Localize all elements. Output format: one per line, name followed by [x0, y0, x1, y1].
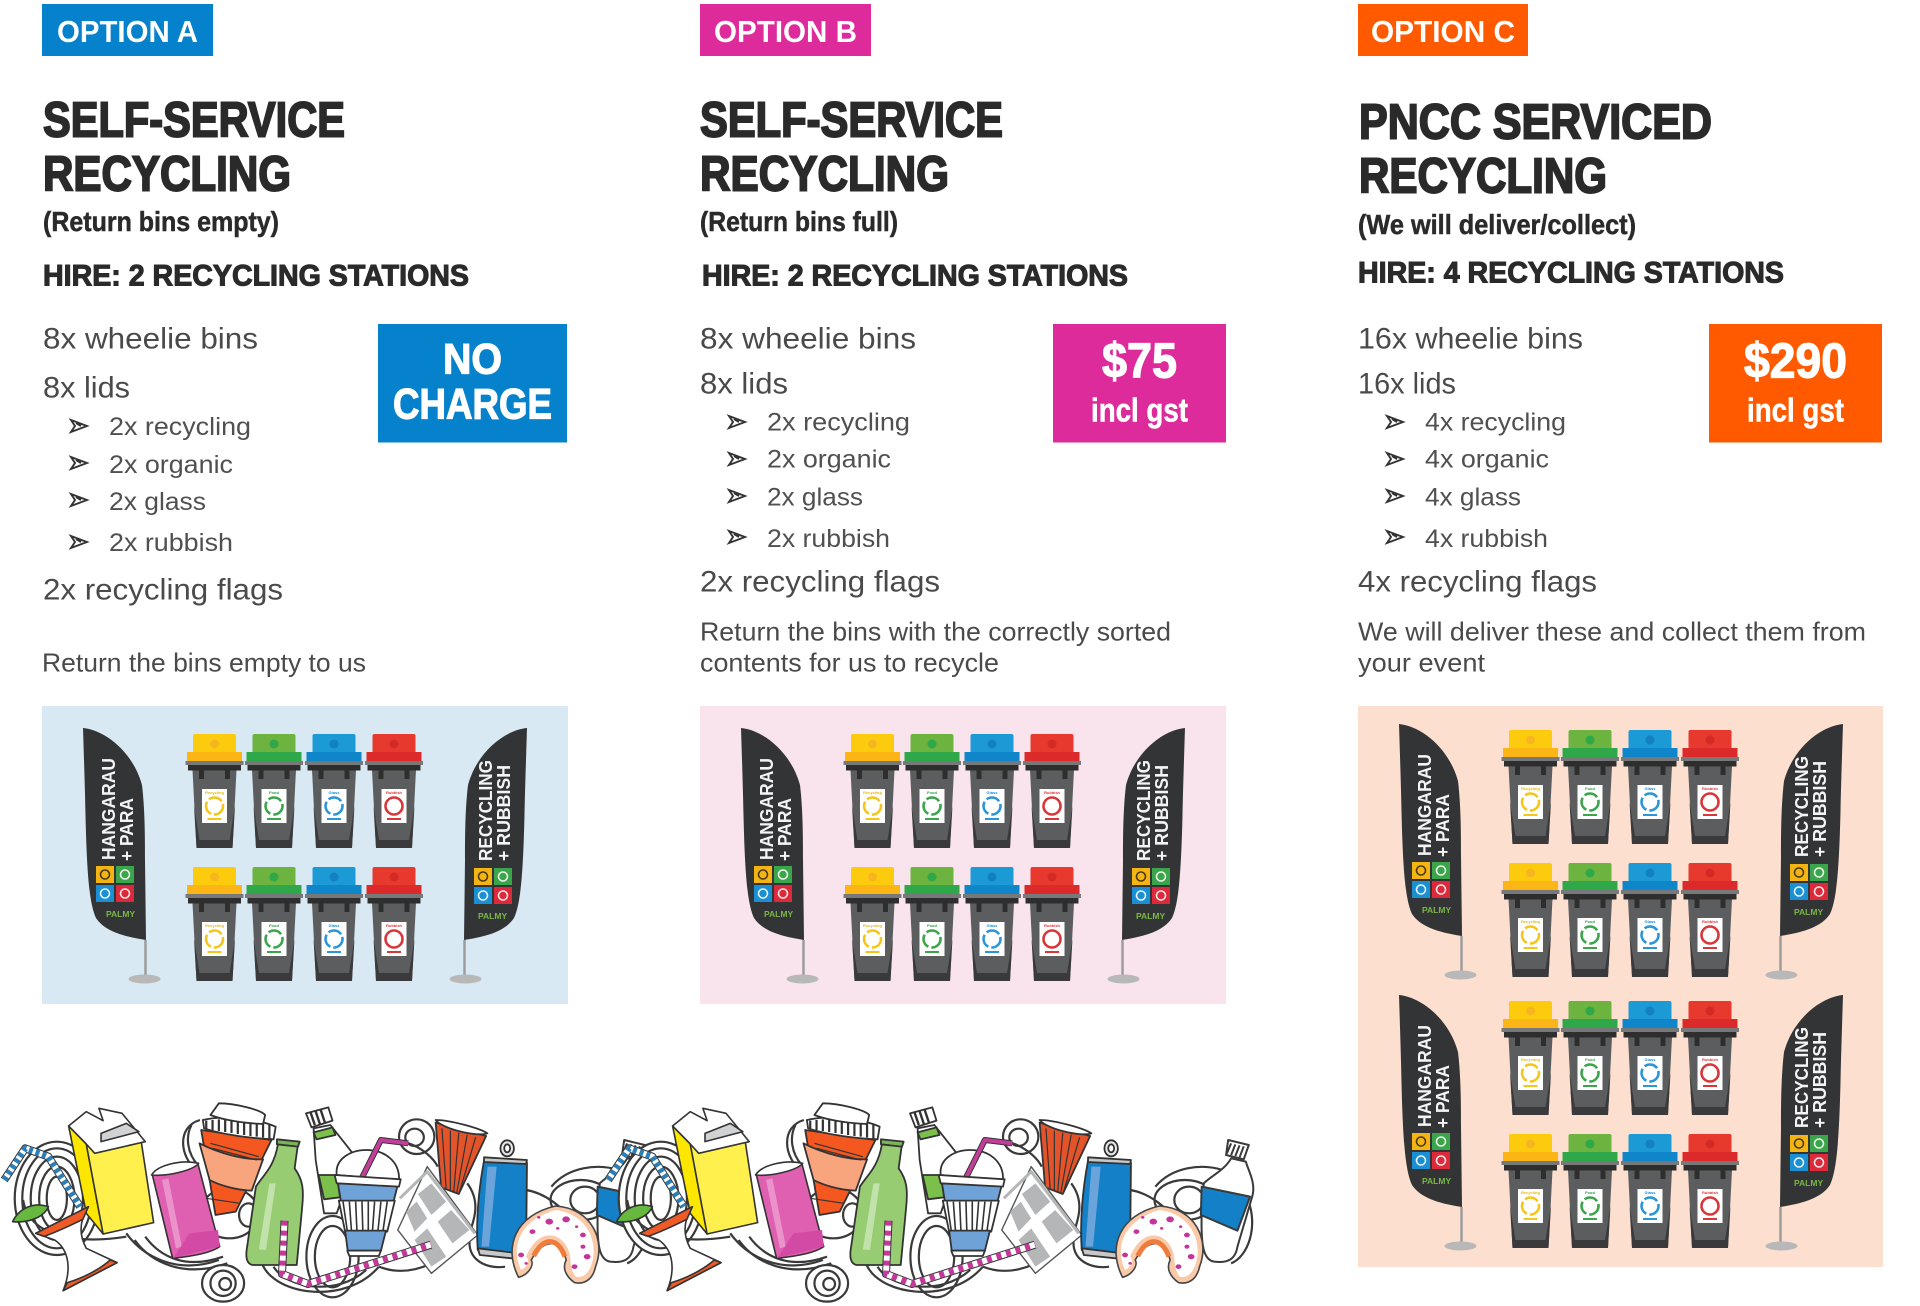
- bins: bottom row: Recycling: [1521, 919, 1540, 924]
- bins: bottom row: [186, 867, 423, 981]
- lower station: [1399, 995, 1843, 1250]
- price box: $290: $290: [1744, 334, 1847, 388]
- panel: option A: [42, 4, 567, 678]
- note: contents for us to recycle: [700, 648, 999, 678]
- bins: top row: Glass: [1645, 786, 1656, 791]
- flag: Hangarau + Para: [1399, 995, 1476, 1250]
- hire heading: HIRE: 2 RECYCLING STATIONS: [702, 260, 1128, 292]
- bins: top row: Rubbish: [1044, 790, 1061, 795]
- contents list: 2x rubbish: [109, 529, 233, 557]
- heading: PNCC serviced recycling: PNCC SERVICED: [1359, 96, 1712, 150]
- bins: bottom row: Glass: [1645, 1190, 1656, 1195]
- note: [1358, 616, 1866, 678]
- heading: self-service recycling: [700, 94, 1003, 202]
- heading: PNCC serviced recycling: RECYCLING: [1359, 150, 1607, 204]
- bins: bottom row: Recycling: [863, 923, 882, 928]
- bins: top row: [844, 734, 1081, 848]
- heading: PNCC serviced recycling: [1359, 96, 1712, 204]
- note: We will deliver these and collect them from: [1358, 616, 1866, 646]
- price box: $290: [1709, 324, 1882, 442]
- illustration panel: option C stations: [1358, 706, 1883, 1267]
- bins: bottom row: Rubbish: [1044, 923, 1061, 928]
- bins: top row: Food: [269, 790, 279, 795]
- heading: self-service recycling: SELF-SERVICE: [700, 94, 1003, 148]
- badge: option B: [700, 4, 871, 56]
- bins: top row: Recycling: [205, 790, 224, 795]
- contents list: 16x lids: [1358, 368, 1456, 400]
- hire heading: HIRE: 4 RECYCLING STATIONS: [1358, 256, 1784, 290]
- heading: self-service recycling: SELF-SERVICE: [43, 94, 345, 148]
- bins: bottom row: Rubbish: [1702, 919, 1719, 924]
- flag: Recycling + Rubbish: + RUBBISH: [494, 765, 514, 861]
- contents list: 2x rubbish: [767, 525, 890, 553]
- flag: Hangarau + Para: PALMY: [106, 909, 135, 919]
- subheading: (We will deliver/collect): [1358, 209, 1636, 240]
- contents list: 8x wheelie bins: [700, 322, 916, 356]
- panel: option B: [700, 4, 1226, 678]
- bins: bottom row: [1502, 863, 1739, 977]
- price box: no charge: NO: [443, 336, 502, 384]
- contents list: 4x recycling: [1425, 408, 1566, 436]
- flag: Recycling + Rubbish: RECYCLING: [1792, 1027, 1812, 1128]
- flag: Hangarau + Para: PALMY: [1422, 1176, 1451, 1186]
- flag: Hangarau + Para: + PARA: [117, 798, 137, 861]
- bins: bottom row: Recycling: [1521, 1190, 1540, 1195]
- flag: Hangarau + Para: + PARA: [1433, 1065, 1453, 1128]
- flag: Hangarau + Para: [1399, 724, 1476, 980]
- subheading: (Return bins empty): [43, 206, 279, 237]
- flag: Recycling + Rubbish: [1108, 728, 1185, 984]
- bins: bottom row: Rubbish: [1702, 1190, 1719, 1195]
- upper station: [1399, 724, 1843, 980]
- flag: Recycling + Rubbish: + RUBBISH: [1810, 1032, 1830, 1128]
- bins: top row: Rubbish: [1702, 1057, 1719, 1062]
- heading: self-service recycling: RECYCLING: [700, 148, 949, 202]
- bins: bottom row: Rubbish: [386, 923, 403, 928]
- flag: Hangarau + Para: + PARA: [775, 798, 795, 861]
- contents list: 4x glass: [1425, 484, 1521, 512]
- note: [700, 616, 1171, 678]
- badge: option C: [1358, 4, 1528, 56]
- flag: Hangarau + Para: [741, 728, 818, 984]
- flag: Hangarau + Para: [83, 728, 160, 984]
- contents list: 2x recycling flags: [43, 574, 283, 606]
- bins: bottom row: [1502, 1134, 1739, 1248]
- bins: top row: Food: [1585, 786, 1595, 791]
- flag: Hangarau + Para: HANGARAU: [1415, 1025, 1435, 1127]
- price box: no charge: CHARGE: [393, 380, 552, 428]
- doodle copy: left: [4, 1103, 649, 1302]
- bins: top row: Rubbish: [1702, 786, 1719, 791]
- contents list: [700, 322, 940, 598]
- heading: self-service recycling: [43, 94, 345, 202]
- flag: Hangarau + Para: PALMY: [764, 909, 793, 919]
- flag: Hangarau + Para: HANGARAU: [757, 758, 777, 860]
- flag: Recycling + Rubbish: + RUBBISH: [1810, 761, 1830, 857]
- flag: Recycling + Rubbish: RECYCLING: [1134, 760, 1154, 861]
- heading: self-service recycling: RECYCLING: [43, 148, 291, 202]
- note: Return the bins empty to us: [42, 648, 366, 678]
- bins: bottom row: Food: [927, 923, 937, 928]
- bins: top row: Recycling: [863, 790, 882, 795]
- contents list: 8x wheelie bins: [43, 322, 258, 356]
- flag: Hangarau + Para: HANGARAU: [1415, 754, 1435, 856]
- flag: Recycling + Rubbish: PALMY: [478, 911, 507, 921]
- contents list: 2x recycling: [767, 408, 910, 436]
- subheading: (Return bins full): [700, 206, 898, 237]
- bins: top row: [1502, 730, 1739, 844]
- panel: option C: [1358, 4, 1882, 678]
- flag: Recycling + Rubbish: [1766, 995, 1843, 1250]
- bins: bottom row: Glass: [329, 923, 340, 928]
- flag: Recycling + Rubbish: PALMY: [1136, 911, 1165, 921]
- doodle copy: right: [608, 1103, 1253, 1302]
- badge: option A: OPTION A: [57, 14, 198, 49]
- note: Return the bins with the correctly sorted: [700, 616, 1171, 646]
- contents list: 2x recycling flags: [700, 566, 940, 598]
- bins: top row: [1502, 1001, 1739, 1115]
- contents list: 2x recycling: [109, 413, 251, 441]
- bins: bottom row: Food: [1585, 919, 1595, 924]
- flag: Hangarau + Para: HANGARAU: [99, 758, 119, 860]
- hire heading: HIRE: 2 RECYCLING STATIONS: [43, 260, 469, 292]
- contents list: 16x wheelie bins: [1358, 322, 1583, 356]
- flag: Recycling + Rubbish: PALMY: [1794, 907, 1823, 917]
- flag: Recycling + Rubbish: PALMY: [1794, 1178, 1823, 1188]
- bins: top row: Glass: [1645, 1057, 1656, 1062]
- flag: Recycling + Rubbish: RECYCLING: [476, 760, 496, 861]
- contents list: 8x lids: [700, 368, 788, 400]
- bins: top row: Food: [1585, 1057, 1595, 1062]
- flag: Recycling + Rubbish: + RUBBISH: [1152, 765, 1172, 861]
- bins: bottom row: Glass: [1645, 919, 1656, 924]
- flag: Recycling + Rubbish: [450, 728, 527, 984]
- contents list: 2x organic: [767, 446, 891, 474]
- price box: $75: $75: [1102, 334, 1177, 388]
- bins: bottom row: Recycling: [205, 923, 224, 928]
- bins: bottom row: Glass: [987, 923, 998, 928]
- illustration: waste items doodle band: [4, 1103, 1253, 1302]
- contents list: 2x glass: [767, 484, 863, 512]
- bins: top row: Recycling: [1521, 786, 1540, 791]
- contents list: 2x glass: [109, 488, 206, 516]
- contents list: 4x organic: [1425, 446, 1549, 474]
- badge: option B: OPTION B: [714, 14, 857, 49]
- flag: Hangarau + Para: + PARA: [1433, 794, 1453, 857]
- contents list: 4x rubbish: [1425, 525, 1548, 553]
- contents list: [1358, 322, 1597, 598]
- bins: top row: Glass: [329, 790, 340, 795]
- price box: no charge: [378, 324, 567, 442]
- contents list: 4x recycling flags: [1358, 566, 1597, 598]
- bins: bottom row: Food: [269, 923, 279, 928]
- badge: option C: OPTION C: [1371, 14, 1515, 49]
- note: your event: [1358, 648, 1486, 678]
- contents list: 8x lids: [43, 372, 130, 404]
- bins: top row: Recycling: [1521, 1057, 1540, 1062]
- price box: $75: incl gst: [1091, 392, 1188, 428]
- contents list: [43, 322, 283, 606]
- bins: bottom row: [844, 867, 1081, 981]
- bins: bottom row: Food: [1585, 1190, 1595, 1195]
- price box: $75: [1053, 324, 1226, 442]
- flag: Hangarau + Para: PALMY: [1422, 905, 1451, 915]
- illustration panel: option B station: [700, 706, 1226, 1004]
- bins: top row: Rubbish: [386, 790, 403, 795]
- flags and bins: [741, 728, 1185, 984]
- flag: Recycling + Rubbish: RECYCLING: [1792, 756, 1812, 857]
- badge: option A: [42, 4, 213, 56]
- bins: top row: Glass: [987, 790, 998, 795]
- contents list: 2x organic: [109, 451, 233, 479]
- bins: top row: Food: [927, 790, 937, 795]
- bins: top row: [186, 734, 423, 848]
- illustration panel: option A station: [42, 706, 568, 1004]
- price box: $290: incl gst: [1747, 392, 1844, 428]
- flag: Recycling + Rubbish: [1766, 724, 1843, 980]
